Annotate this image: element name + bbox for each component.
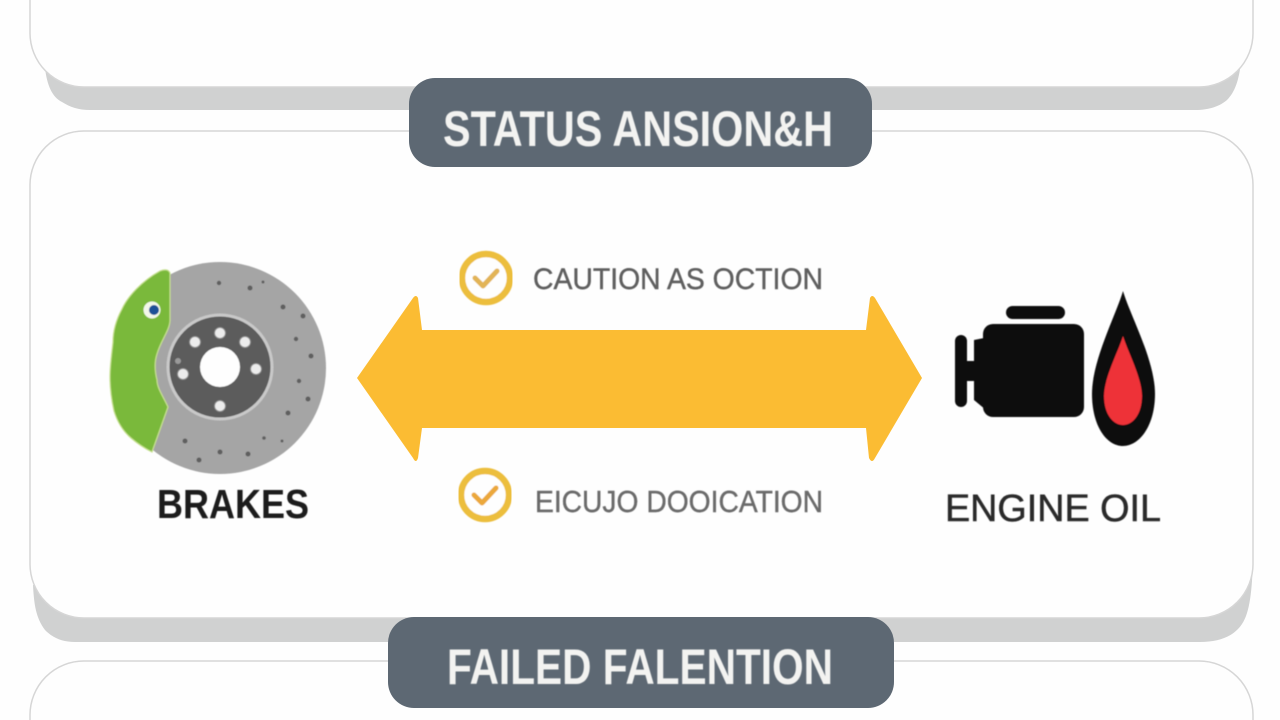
panel: bottom card [30, 661, 1253, 720]
label: brakes: BRAKES [157, 481, 309, 527]
brake hub [168, 315, 272, 419]
double-headed arrow [357, 296, 922, 461]
icon: check circle [462, 254, 510, 302]
status item: dedication: EICUJO DOOICATION [535, 484, 823, 519]
icon: engine [955, 306, 1084, 417]
icon: check circle [461, 471, 509, 519]
panel: middle card [30, 131, 1253, 642]
heading badge: status: STATUS ANSION&H [443, 101, 833, 157]
label: engine oil: ENGINE OIL [945, 488, 1161, 530]
status item: caution [462, 254, 823, 302]
heading badge: failed [388, 617, 894, 708]
panel: top card [30, 0, 1253, 110]
heading badge: status [409, 78, 872, 167]
icon: brake disc [110, 262, 326, 474]
brake disc perforations [182, 280, 314, 462]
icon: oil drop [1092, 291, 1155, 446]
status item: dedication [461, 471, 823, 519]
brake caliper [110, 270, 170, 452]
heading badge: failed: FAILED FALENTION [447, 639, 833, 695]
status item: caution: CAUTION AS OCTION [533, 263, 823, 296]
